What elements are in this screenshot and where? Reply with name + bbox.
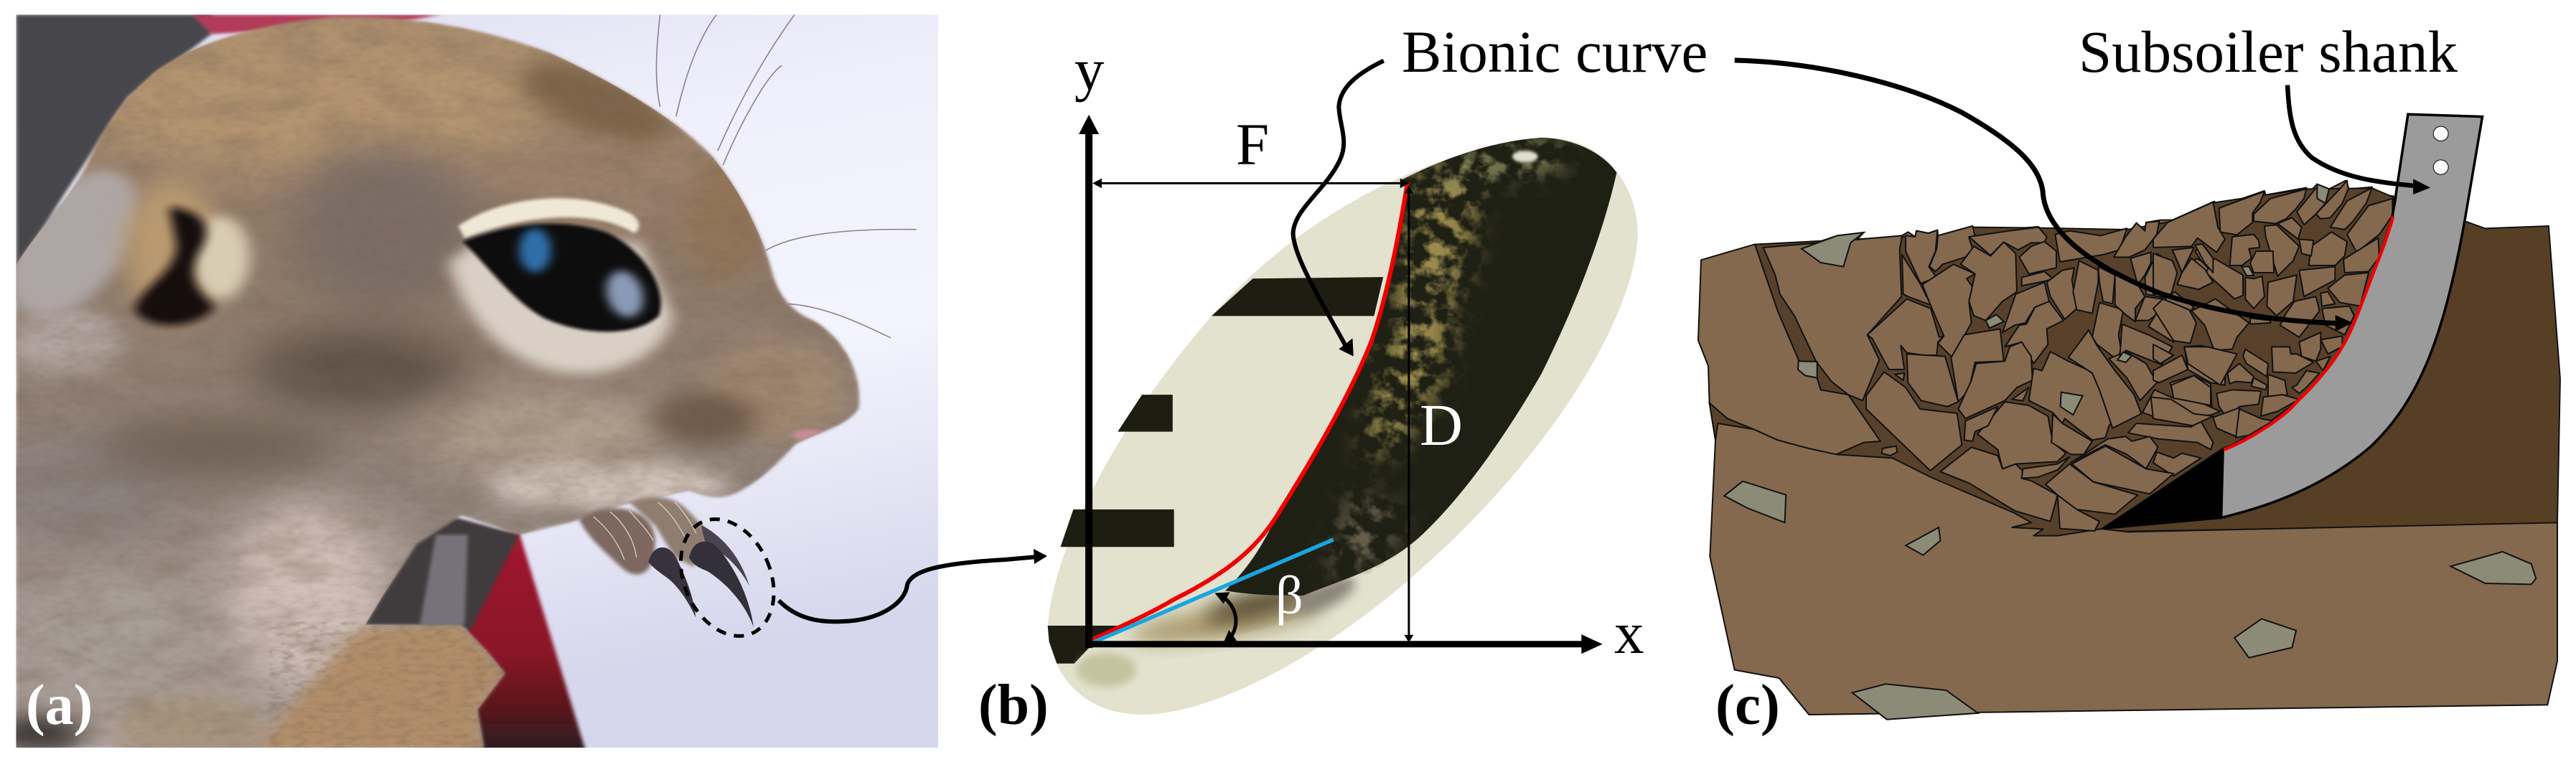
angle label beta: β: [1275, 565, 1303, 626]
black shank tip: [2102, 450, 2223, 529]
claws and paw close-up: [579, 497, 792, 651]
label (c): (c): [1715, 672, 1780, 737]
dashed claw circle: [663, 504, 792, 651]
beta angle arc: [1214, 592, 1237, 643]
panel c: soil cross-section: [1698, 181, 2557, 715]
dark claw body: [1225, 138, 1616, 596]
paw fur front: [579, 508, 655, 575]
claw tip stain: [1077, 653, 1136, 687]
label (b): (b): [978, 674, 1049, 737]
head and body: [16, 17, 859, 748]
bionic curve pointer arrow: [1293, 61, 1384, 357]
nose: [792, 429, 825, 441]
panel b: claw close-up diagram: [1048, 61, 1638, 715]
left crack line: [1753, 429, 1836, 454]
soil fragments: left and centre: [1764, 221, 2225, 531]
claw photo ellipse background: [1048, 138, 1638, 715]
claw colour mottling: [1326, 141, 1564, 573]
rocks inside crushed zone: [1798, 184, 2329, 415]
shank bolt holes: [2433, 126, 2448, 174]
whiskers: [656, 14, 917, 338]
soil fragments: near shank: [2151, 181, 2392, 438]
y axis: [1079, 115, 1099, 648]
subsoiler shank: [2221, 114, 2483, 518]
front paw: [256, 625, 505, 751]
left crack sliver: [1710, 403, 1753, 440]
heading: Bionic curve: Bionic curve: [1402, 19, 1708, 85]
connector arrow from claw to panel b: [779, 549, 1047, 621]
fur shading patches: [0, 34, 846, 762]
paw fur strands: [594, 502, 696, 560]
label (a): (a): [26, 674, 93, 737]
F dimension: [1092, 179, 1410, 188]
ruler marks: [1048, 277, 1383, 664]
subsoiler shank and arrows: [1735, 60, 2483, 529]
dark backdrop top left: [16, 14, 212, 272]
red bionic edge: [2223, 216, 2393, 450]
red backdrop at top: [192, 14, 442, 34]
panel a: squirrel photo: [0, 14, 938, 762]
dimension label D: D: [1420, 392, 1463, 458]
ear: [0, 155, 250, 331]
paw fur back: [629, 497, 708, 567]
soil body: [1698, 181, 2557, 715]
red bionic curve: [1092, 182, 1408, 639]
crushed zone cracks: [1755, 188, 2394, 536]
axis label y: y: [1074, 37, 1105, 103]
dark forelegs: [365, 517, 521, 631]
D dimension: [1405, 186, 1413, 643]
claw right front: [689, 542, 754, 627]
claw left: [648, 547, 695, 618]
photo background: [16, 14, 938, 748]
blue tangent line: [1092, 540, 1334, 643]
subsoiler shank pointer arrow: [2287, 85, 2430, 194]
dimension label F: F: [1236, 111, 1269, 177]
paw fine texture: [269, 622, 506, 748]
rocks in lower soil: [1724, 481, 2536, 720]
eye: [449, 198, 673, 374]
lower claw fade: [1128, 570, 1359, 651]
red backdrop below head: [462, 532, 586, 751]
dark furrow back wall: [2102, 221, 2560, 532]
bionic curve pointer arrow: [1735, 60, 2353, 331]
x axis: [1087, 634, 1603, 654]
heading: Subsoiler shank: Subsoiler shank: [2079, 19, 2458, 85]
claw right back: [701, 525, 749, 586]
axis label x: x: [1614, 600, 1644, 666]
fur texture: [16, 14, 868, 748]
fine fur speckle: [16, 14, 868, 748]
